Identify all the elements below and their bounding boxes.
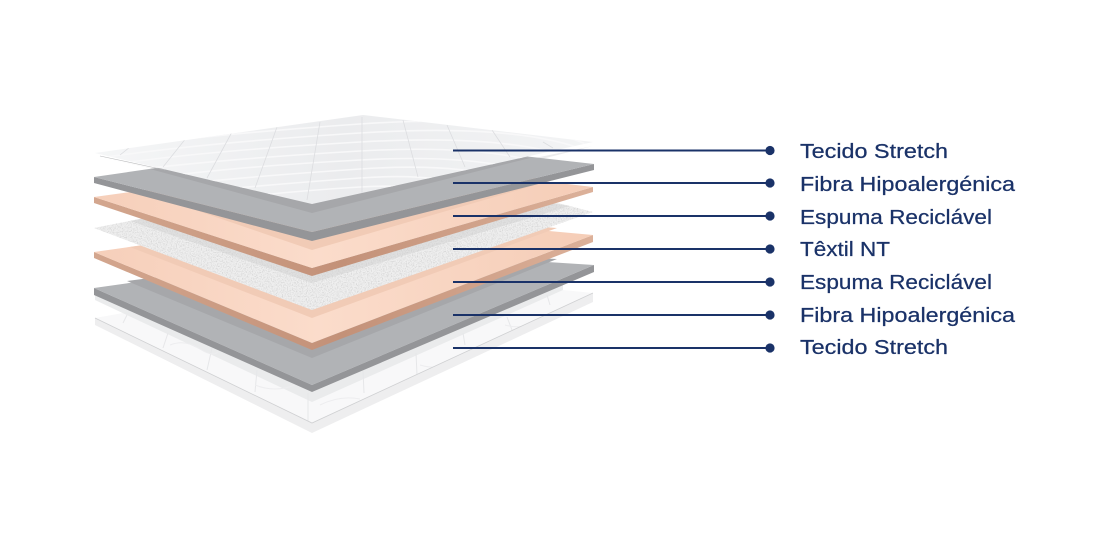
leader line: Espuma Reciclável lower	[453, 277, 775, 287]
leader line: Espuma Reciclável	[453, 211, 775, 221]
layer: bottom stretch fabric	[95, 270, 593, 433]
label: Fibra Hipoalergénica lower: Fibra Hipoalergénica	[800, 305, 1016, 327]
leader line: Tecido Stretch lower	[453, 343, 775, 353]
shadow under top fabric	[100, 146, 593, 210]
layer: upper hypoallergenic fibre	[94, 138, 594, 241]
layer: lower hypoallergenic fibre	[94, 250, 594, 392]
infographic	[94, 115, 1016, 433]
label: Espuma Reciclável lower: Espuma Reciclável	[800, 272, 992, 294]
label: Tecido Stretch: Tecido Stretch	[800, 141, 948, 163]
layer: lower recyclable foam	[94, 214, 593, 350]
layer: top stretch fabric	[95, 115, 593, 204]
mattress layers	[94, 115, 594, 433]
leader line: Têxtil NT	[453, 244, 775, 254]
leader line: Tecido Stretch	[453, 146, 775, 155]
layer: upper recyclable foam	[94, 160, 593, 276]
layer: NT textile	[94, 175, 593, 310]
label: Têxtil NT: Têxtil NT	[800, 239, 890, 261]
label: Tecido Stretch lower: Tecido Stretch	[800, 337, 948, 359]
leader line: Fibra Hipoalergénica lower	[453, 310, 775, 320]
leader line: Fibra Hipoalergénica	[453, 178, 775, 188]
label: Fibra Hipoalergénica: Fibra Hipoalergénica	[800, 174, 1016, 196]
label: Espuma Reciclável: Espuma Reciclável	[800, 207, 992, 229]
